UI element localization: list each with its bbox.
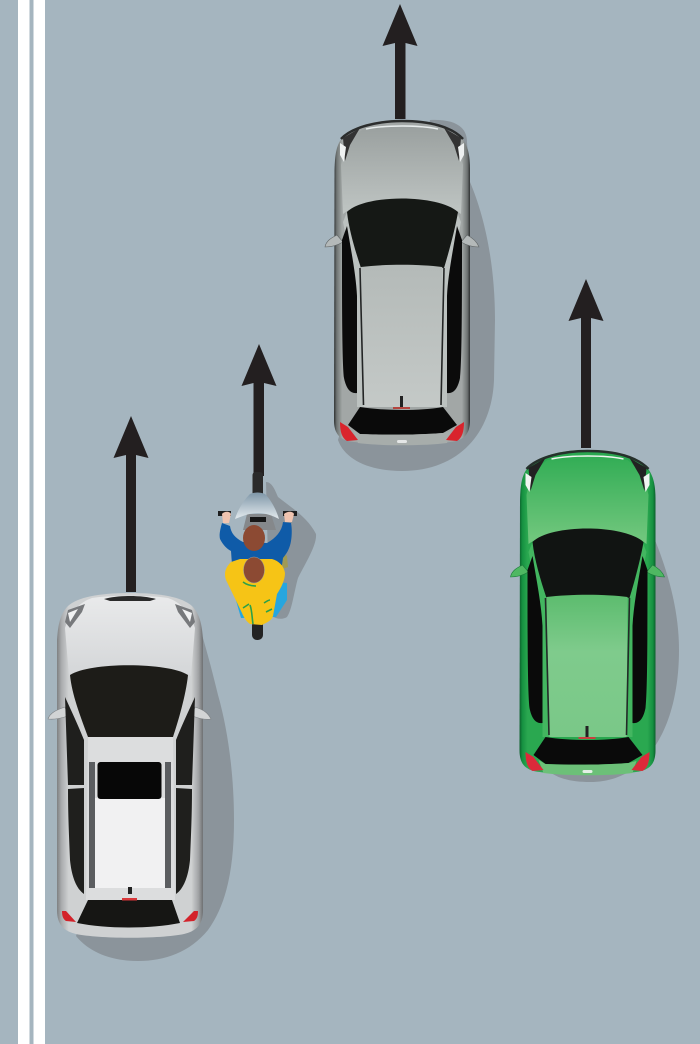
arrow: green car direction	[568, 279, 604, 448]
shadow: white car	[76, 615, 234, 961]
instrument area	[243, 514, 276, 530]
windscreen	[70, 665, 188, 737]
arrow: motorcycle direction	[242, 344, 276, 476]
mirrors	[48, 707, 211, 719]
front rider helmet	[243, 525, 265, 551]
hood	[341, 126, 463, 214]
front wheel	[252, 472, 263, 496]
front rider torso and arms	[220, 522, 292, 565]
headlight highlights	[526, 473, 650, 492]
mirrors	[325, 235, 479, 247]
hood	[65, 596, 195, 676]
side bag	[280, 552, 288, 570]
sunroof	[98, 762, 162, 799]
tail lights	[526, 752, 650, 771]
rear window	[534, 737, 642, 765]
badge	[582, 770, 592, 773]
front trim	[552, 456, 624, 459]
roof	[361, 265, 442, 407]
A pillars	[343, 212, 461, 407]
front rider hands	[222, 512, 294, 523]
jacket stripes	[243, 582, 272, 624]
car: white estate	[48, 593, 211, 938]
wiper and stop light	[400, 396, 403, 408]
shadow: green car	[545, 528, 679, 782]
body	[334, 120, 470, 444]
shadow: grey car	[338, 120, 495, 471]
rear wheel	[252, 620, 263, 640]
windows left	[65, 697, 84, 894]
side window left	[342, 226, 357, 393]
headlights	[528, 458, 646, 491]
A pillars	[528, 542, 646, 737]
passenger legs	[233, 582, 287, 618]
arrow: grey car direction	[382, 4, 418, 119]
headlight highlights	[68, 609, 192, 622]
rear window	[348, 407, 457, 435]
roof seams	[360, 268, 444, 405]
roof	[86, 737, 175, 900]
side window right	[632, 556, 648, 723]
roof seams	[546, 598, 630, 735]
instrument dials	[250, 517, 266, 522]
front edge	[341, 121, 463, 139]
roof	[546, 595, 628, 737]
side window right	[447, 226, 462, 393]
shadow: motorcycle	[266, 482, 316, 619]
car: grey hatchback	[325, 120, 479, 445]
rear rider jacket	[225, 559, 285, 625]
rear window	[77, 900, 180, 928]
white roof panel	[95, 798, 165, 888]
wiper and stop light	[586, 726, 588, 738]
handlebars	[218, 511, 297, 516]
headlights	[65, 604, 195, 628]
rear rider helmet	[244, 557, 264, 583]
tail lights	[340, 422, 464, 441]
hood	[526, 456, 648, 544]
roof rails	[89, 762, 171, 888]
double white lane line	[18, 0, 45, 1044]
windscreen	[532, 528, 644, 598]
body	[57, 593, 203, 938]
bumper	[353, 430, 451, 445]
badge	[397, 440, 407, 443]
front edge	[526, 451, 648, 469]
windscreen	[347, 198, 458, 268]
windows right	[176, 697, 195, 894]
tail lights	[62, 911, 198, 922]
motorcycle with two riders	[218, 472, 297, 640]
car: green hatchback	[510, 450, 664, 775]
fairing	[235, 492, 279, 519]
wiper and stop light	[128, 887, 132, 894]
front trim	[366, 126, 438, 129]
headlight highlights	[340, 143, 464, 162]
body	[520, 450, 656, 774]
arrow: white car direction	[114, 416, 148, 592]
grille	[104, 596, 156, 601]
headlights	[343, 128, 461, 161]
mirrors	[510, 565, 664, 577]
side window left	[528, 556, 542, 723]
bumper	[538, 760, 636, 775]
